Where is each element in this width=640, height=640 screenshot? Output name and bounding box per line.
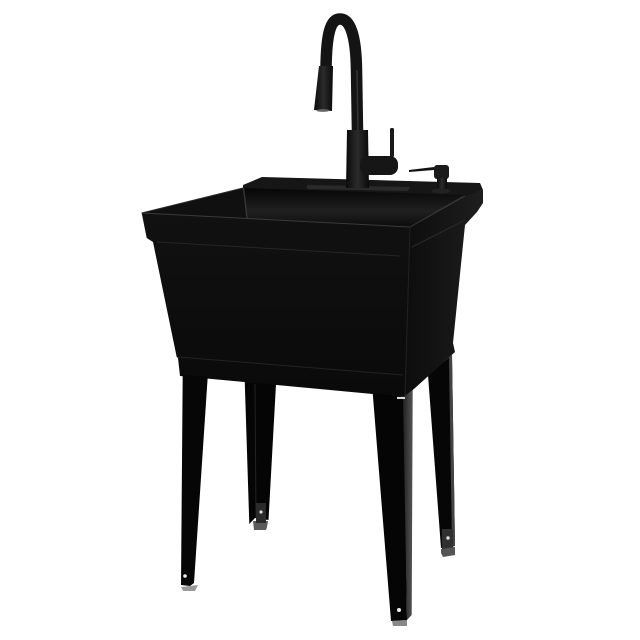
- leg: back left: [245, 380, 276, 530]
- leg: back right: [428, 355, 455, 557]
- faucet spray head: [314, 66, 333, 111]
- tub front panel: [142, 213, 410, 397]
- leg: front left: [181, 375, 208, 591]
- tub side panel: [405, 190, 483, 397]
- soap dispenser: [409, 165, 450, 193]
- faucet lever: [390, 128, 394, 157]
- faucet handle: [360, 156, 398, 175]
- faucet base: [346, 130, 369, 188]
- sink tub: [142, 177, 483, 397]
- basin interior: [142, 188, 465, 227]
- leg: front right: [373, 390, 413, 626]
- faucet neck: [326, 19, 358, 132]
- faucet: [314, 19, 398, 188]
- rear deck: [243, 177, 483, 196]
